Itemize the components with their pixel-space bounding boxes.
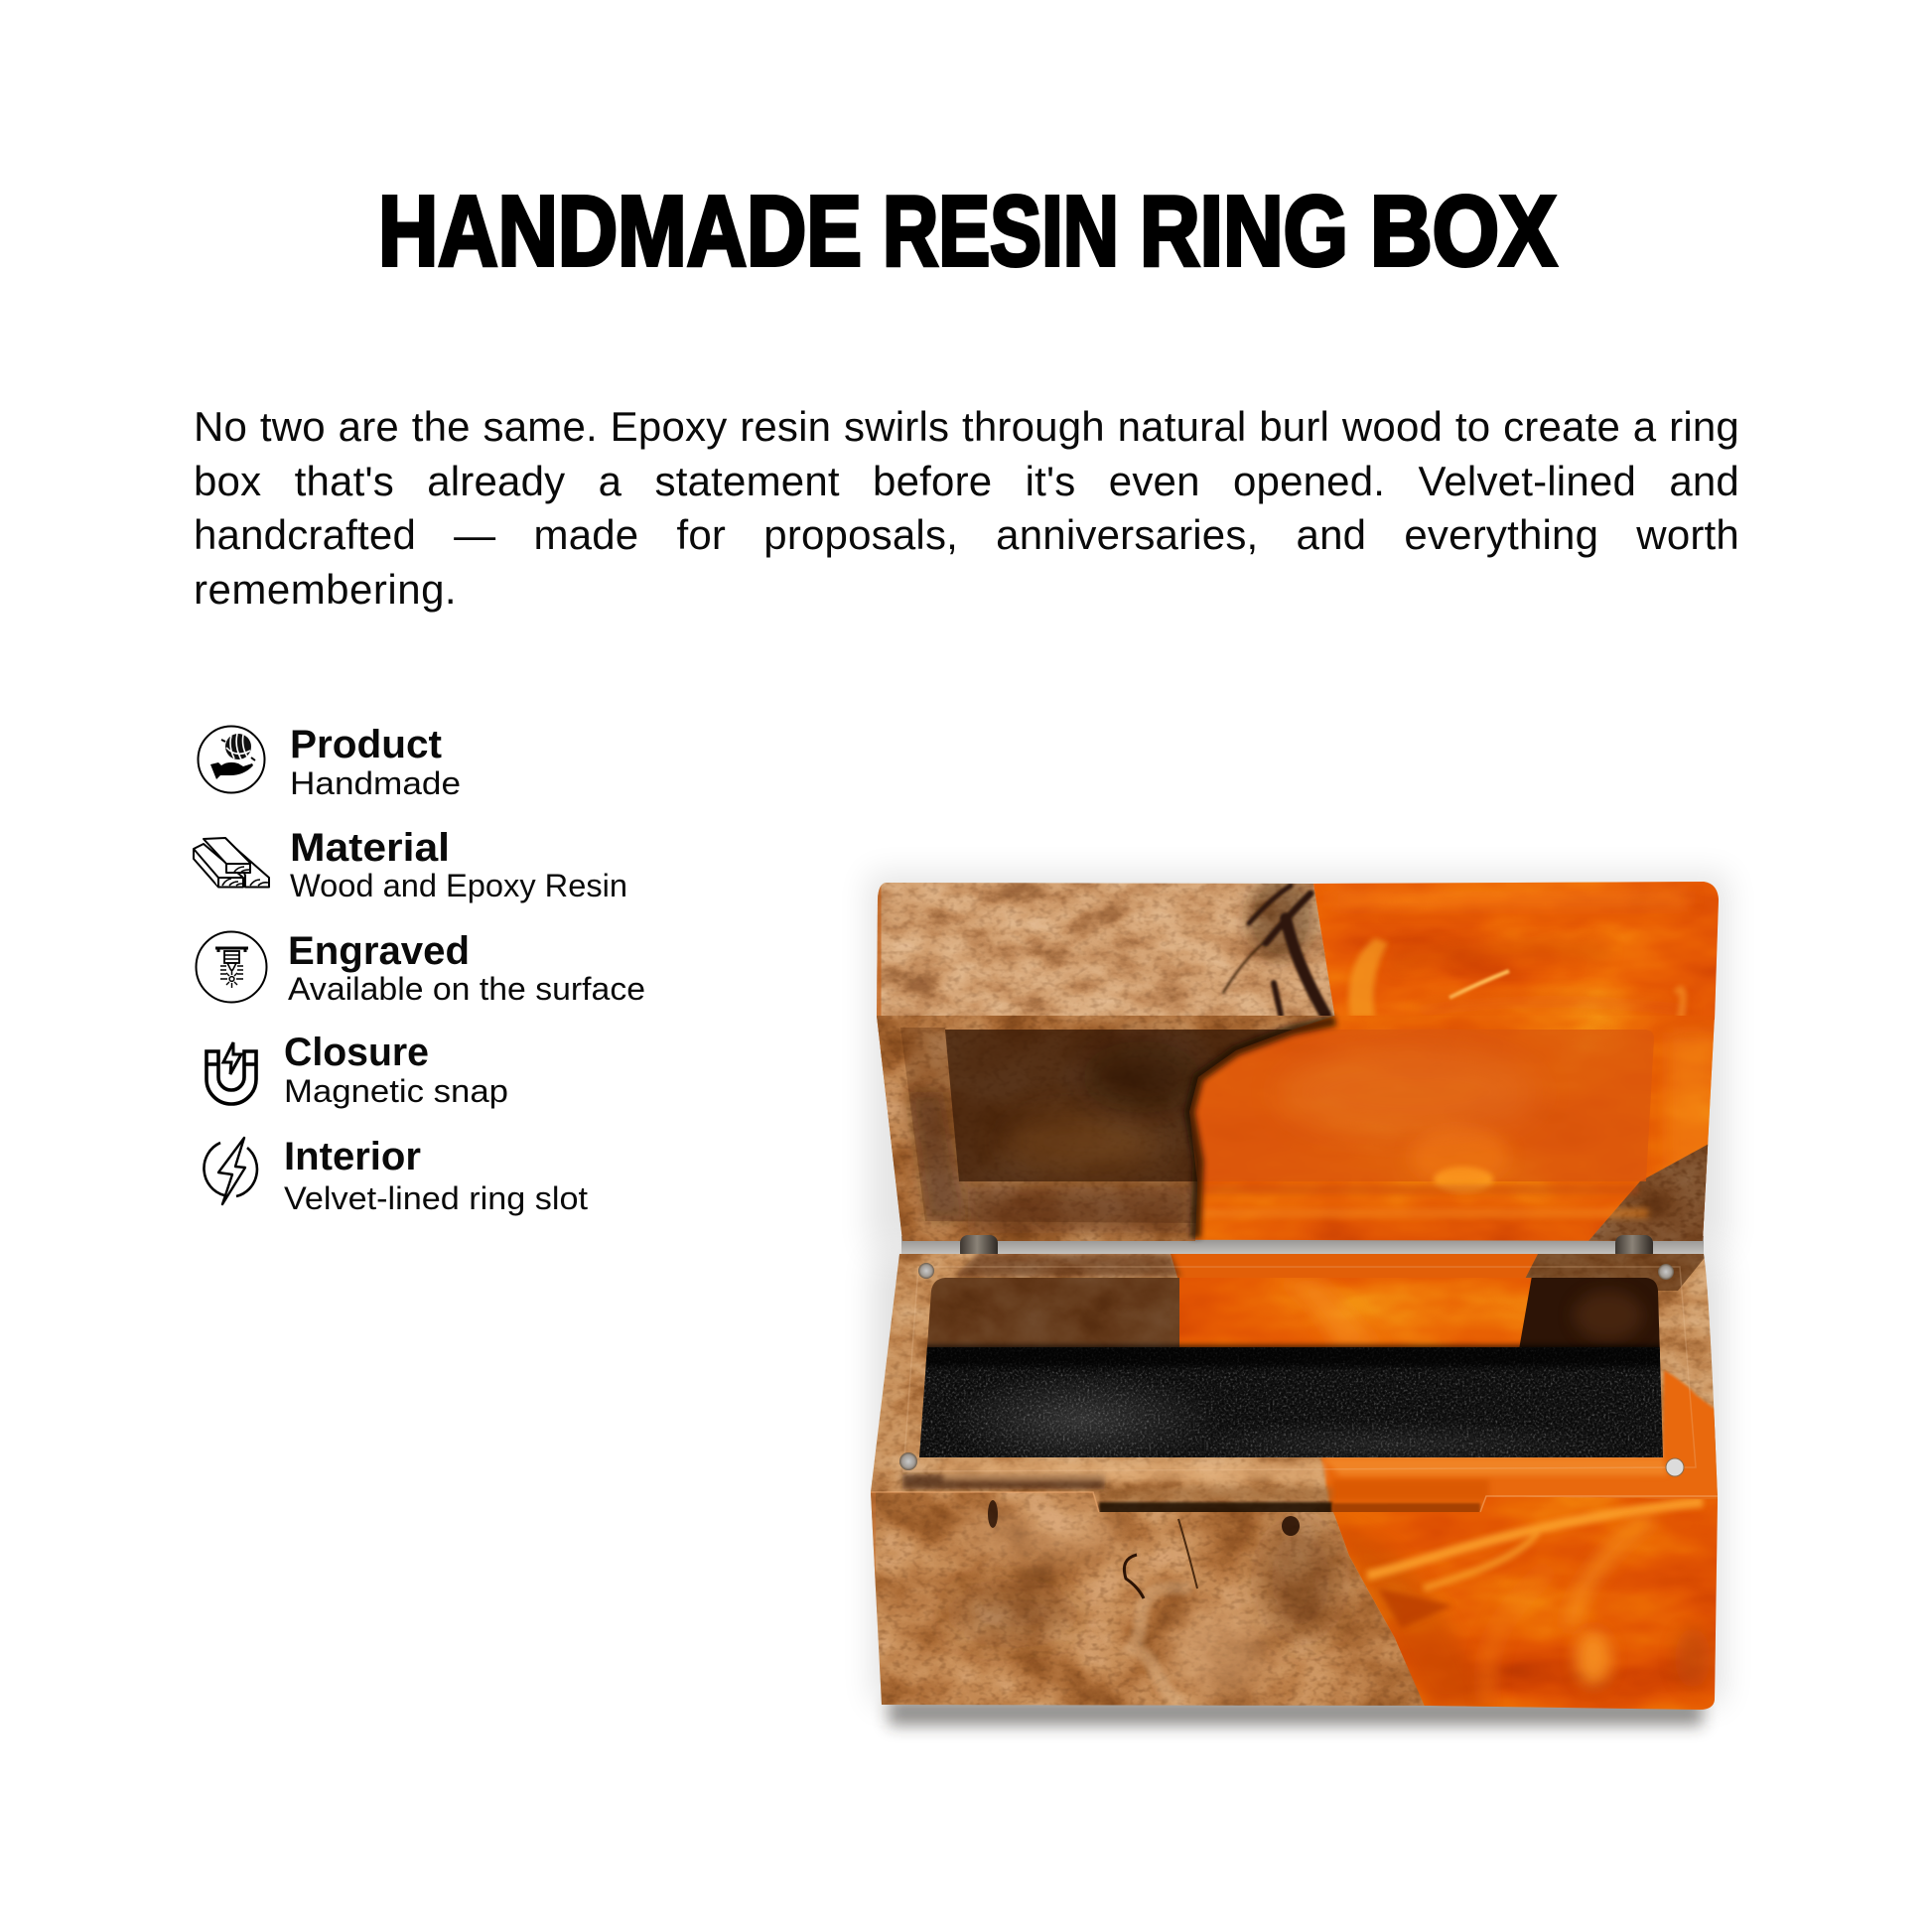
title: [378, 176, 1557, 287]
lid: outer resin face: [1313, 882, 1719, 1020]
box shadow: [869, 874, 1727, 1725]
interior value: Velvet-lined ring slot: [284, 1180, 588, 1216]
lid: wood and resin seam: [1189, 1021, 1335, 1238]
closure value: Magnetic snap: [284, 1073, 508, 1109]
base: velvet foam insert: [913, 1345, 1668, 1469]
lid: inner wood zone: [869, 1013, 1335, 1251]
icon: wood planks: [194, 838, 269, 888]
title: RESIN: [883, 176, 1119, 287]
product value: Handmade: [290, 765, 461, 801]
feature list: [194, 723, 645, 1216]
feature: interior: [204, 1135, 588, 1216]
engraved value: Available on the surface: [288, 971, 645, 1007]
base: magnet screws: [899, 1263, 1684, 1476]
title: RING: [1140, 176, 1348, 287]
product heading: Product: [290, 723, 442, 766]
description paragraph: No two are the same. Epoxy resin swirls through natural burl wood to create a ring: [194, 403, 1739, 450]
lid: outer wood face: [877, 883, 1334, 1018]
lid: inner resin recess: [1189, 1030, 1654, 1181]
hinges: [960, 1235, 1653, 1261]
lid: inner frame: [864, 1013, 1727, 1251]
feature: engraved: [197, 929, 645, 1007]
base: notch edge: [871, 1492, 1718, 1512]
title: BOX: [1370, 176, 1557, 287]
title: HANDMADE: [378, 176, 862, 287]
lid: outer recess shade: [900, 1028, 1201, 1233]
base: rim lip line: [903, 1267, 1696, 1471]
feature: closure: [207, 1031, 508, 1109]
feature: product: [199, 723, 461, 801]
interior heading: Interior: [284, 1135, 421, 1178]
material heading: Material: [290, 826, 450, 870]
description paragraph: handcrafted — made for proposals, anniversaries, and everything worth: [194, 511, 1739, 558]
base: top rim: [864, 1251, 1727, 1519]
product photo: open resin ring box: [864, 874, 1732, 1725]
base: front resin face: [1333, 1496, 1718, 1710]
description paragraph: remembering.: [194, 566, 457, 613]
engraved heading: Engraved: [288, 929, 470, 973]
lid: resin reflections: [1201, 1047, 1648, 1213]
icon: laser engraver: [197, 931, 266, 1003]
icon: lightning bolt in circle: [204, 1138, 257, 1204]
feature: material: [194, 826, 627, 903]
lid: inner recess wood: [945, 1030, 1311, 1181]
hinge gap: [901, 1236, 1704, 1258]
description paragraph: [194, 403, 1739, 613]
icon: magnet: [207, 1042, 256, 1104]
base: cavity back wall: [913, 1276, 1668, 1469]
description paragraph: box that's already a statement before it's even opened. Velvet-lined and: [194, 458, 1739, 504]
closure heading: Closure: [284, 1031, 429, 1074]
material value: Wood and Epoxy Resin: [290, 868, 627, 903]
icon: hand holding yarn ball: [199, 727, 264, 792]
base: front wood face: [864, 1484, 1732, 1718]
